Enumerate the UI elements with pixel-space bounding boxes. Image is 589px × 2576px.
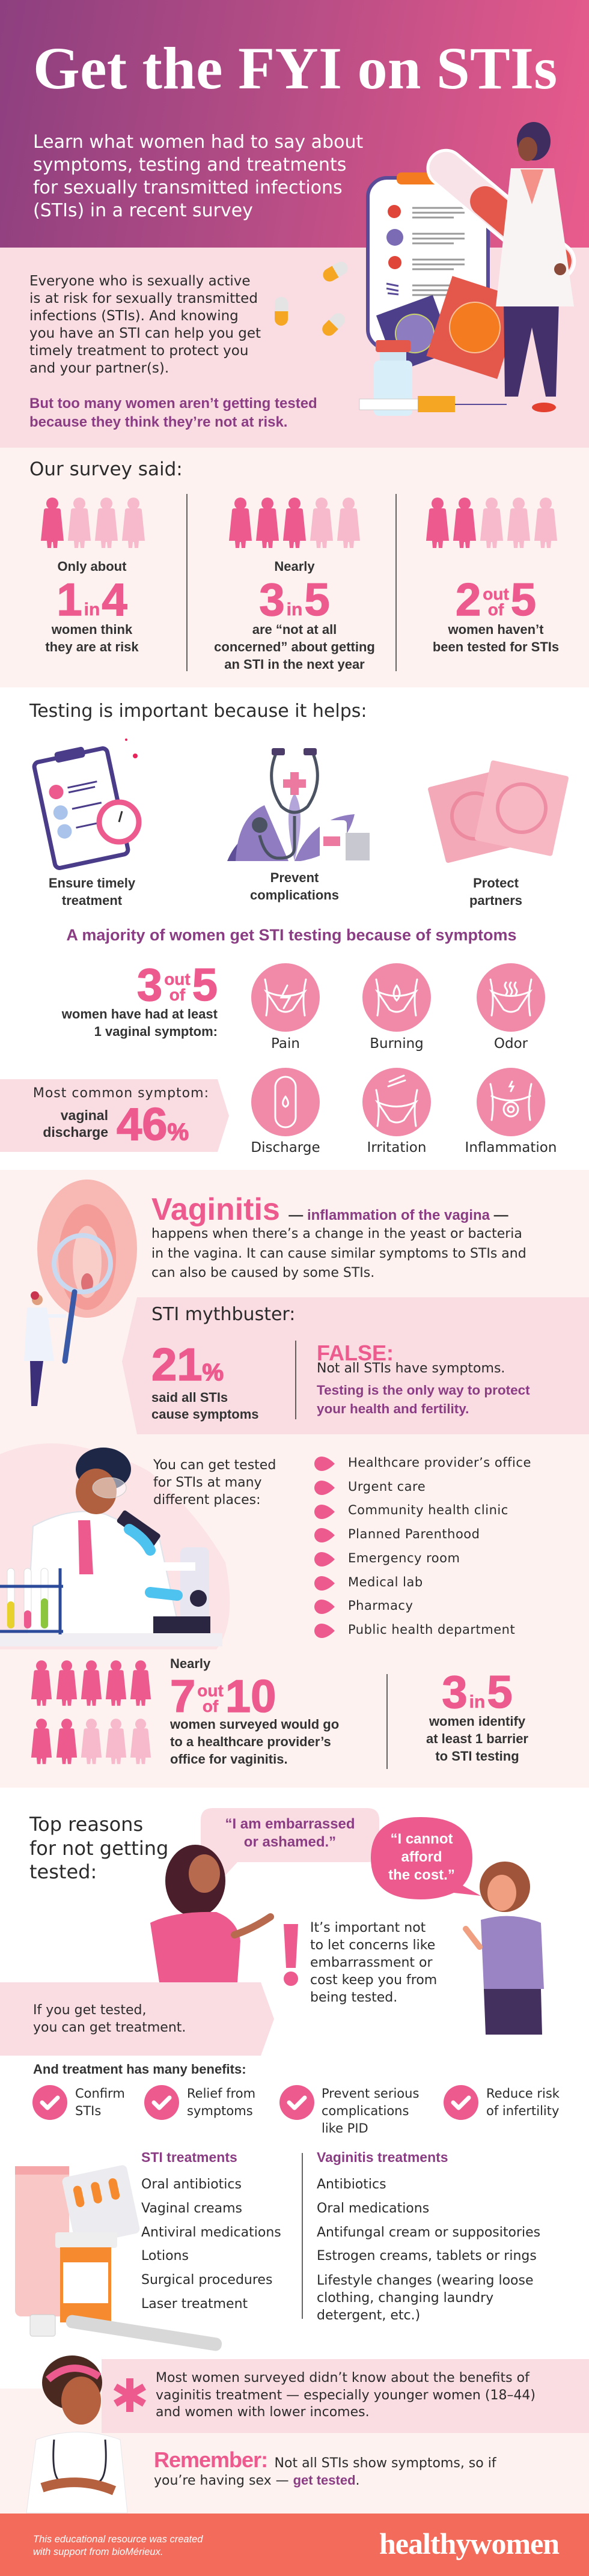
people 7 of 10 xyxy=(31,1660,151,1764)
false callout xyxy=(317,1383,530,1416)
vaginitis treatment note: Most women surveyed didn’t know about the benefits of xyxy=(156,2370,529,2386)
big number 46%: 46% xyxy=(117,1099,189,1150)
big number 3 out of 5: 3 5 xyxy=(137,960,218,1011)
vaginitis text: in the vagina. It can cause similar symptoms to STIs and xyxy=(151,1246,526,1261)
subtitle: Learn what women had to say about xyxy=(33,132,363,153)
vaginitis text: can also be caused by some STIs. xyxy=(151,1265,374,1280)
places list: Emergency room xyxy=(348,1551,460,1565)
benefit: prevent xyxy=(322,2086,419,2136)
icon: stethoscope xyxy=(227,748,370,861)
stat 3 text: been tested for STIs xyxy=(433,639,559,654)
label: prevent complications xyxy=(250,870,339,903)
survey background xyxy=(0,448,589,687)
important text: embarrassment or xyxy=(310,1955,433,1970)
vaginitis text xyxy=(151,1226,526,1280)
7 of 10 text: women surveyed would go xyxy=(170,1717,339,1732)
bubble text: embarrassed: or ashamed.” xyxy=(244,1834,336,1850)
footer logo: healthywomen xyxy=(379,2527,559,2560)
big number 1 in 4: 1in4 xyxy=(56,574,127,626)
big number 21%: 21% xyxy=(151,1339,224,1390)
stat 2 text: an STI in the next year xyxy=(224,657,365,672)
common symptom arrow box xyxy=(0,1079,229,1152)
places list: Medical lab xyxy=(348,1575,423,1589)
treatment arrow text xyxy=(33,2003,186,2035)
scientist with microscope xyxy=(0,1443,230,1649)
treatment arrow box xyxy=(0,1982,274,2056)
vaginal discharge label xyxy=(43,1107,108,1140)
big number 3 out of 5: of xyxy=(169,985,185,1004)
vaginitis section background xyxy=(0,1170,589,1788)
false text: Not all STIs have symptoms. xyxy=(317,1361,505,1376)
important text: cost keep you from xyxy=(310,1973,437,1988)
bubble text: embarrassed: “I am embarrassed xyxy=(225,1816,355,1832)
test tube xyxy=(421,143,582,287)
big number 7 out of 10: out xyxy=(197,1681,224,1700)
heading: top reasons: for not getting xyxy=(29,1836,168,1859)
condoms xyxy=(376,276,523,379)
intro text: is at risk for sexually transmitted xyxy=(29,291,258,306)
benefit: infertility: of infertility xyxy=(486,2104,559,2118)
false callout: your health and fertility. xyxy=(317,1401,469,1416)
places intro: You can get tested xyxy=(153,1458,276,1473)
footer credit: with support from bioMérieux. xyxy=(33,2547,163,2557)
woman in pink xyxy=(150,1845,270,1982)
remember band xyxy=(102,2359,589,2433)
places list: Public health department xyxy=(348,1622,515,1637)
treatment arrow text: you can get treatment. xyxy=(33,2020,186,2035)
STI treatments list: Antiviral medications xyxy=(141,2225,281,2240)
burning: Burning xyxy=(370,1036,424,1052)
barrier text: women identify xyxy=(429,1714,525,1729)
doctor woman xyxy=(26,2355,127,2513)
vaginitis treatments list: Oral medications xyxy=(317,2201,429,2216)
vulva with magnifier xyxy=(24,1180,137,1406)
benefit: confirm xyxy=(75,2086,125,2118)
STI treatments list: Lotions xyxy=(141,2249,189,2264)
big number 3 out of 5: out xyxy=(164,970,191,988)
intro callout xyxy=(29,395,317,430)
bubble text: cost: afford xyxy=(401,1849,442,1865)
stat 2 text xyxy=(214,622,375,672)
benefit: confirm: Confirm xyxy=(75,2086,125,2101)
remember line 2: you’re having sex — get tested. xyxy=(154,2473,360,2488)
heading: top reasons xyxy=(29,1813,168,1883)
benefit: prevent: Prevent serious xyxy=(322,2086,419,2101)
vaginal discharge label: discharge xyxy=(43,1124,108,1140)
asterisk xyxy=(115,2378,144,2412)
stat: only about: Only about xyxy=(58,559,126,574)
clipboard xyxy=(368,172,488,349)
STI treatments list: Surgical procedures xyxy=(141,2273,272,2288)
benefit: infertility: Reduce risk xyxy=(486,2086,560,2101)
barrier text xyxy=(426,1714,528,1764)
bottom section background xyxy=(0,2389,589,2514)
subtitle: for sexually transmitted infections xyxy=(33,177,343,198)
stat 2 text: are “not at all xyxy=(252,622,337,637)
STI treatments list: Laser treatment xyxy=(141,2297,248,2312)
vaginitis heading: Vaginitis — inflammation of the vagina — xyxy=(151,1192,508,1227)
mythbuster band xyxy=(122,1297,589,1434)
vaginitis treatment note: vaginitis treatment — especially younger women (18–44) xyxy=(156,2388,536,2403)
benefit: prevent: like PID xyxy=(322,2121,368,2136)
lifestyle changes item: detergent, etc.) xyxy=(317,2308,420,2323)
places list: Pharmacy xyxy=(348,1598,413,1613)
exclamation mark xyxy=(284,1924,298,1986)
heading: top reasons: tested: xyxy=(29,1860,97,1883)
important text xyxy=(310,1920,437,2005)
label: protect partners: Protect xyxy=(473,875,519,891)
irritation: Irritation xyxy=(367,1140,426,1156)
symptom icon outlines xyxy=(265,979,531,1127)
important text: to let concerns like xyxy=(310,1938,435,1953)
bubble text: cost xyxy=(388,1831,455,1883)
title: Get the FYI on STIs xyxy=(33,35,557,102)
treatment arrow text: If you get tested, xyxy=(33,2003,147,2018)
places list: Planned Parenthood xyxy=(348,1527,480,1541)
7 of 10 text xyxy=(170,1717,339,1767)
label: ensure timely treatment: Ensure timely xyxy=(49,875,135,891)
intro text: timely treatment to protect you xyxy=(29,343,248,359)
places intro xyxy=(153,1458,276,1508)
inflammation: Inflammation xyxy=(465,1140,557,1156)
intro text xyxy=(29,273,261,376)
vaginal discharge label: vaginal xyxy=(61,1107,108,1123)
places list: Healthcare provider’s office xyxy=(348,1455,531,1470)
benefit: infertility xyxy=(486,2086,560,2118)
7 of 10 text: office for vaginitis. xyxy=(170,1752,288,1767)
subtitle xyxy=(33,132,363,221)
lifestyle changes item xyxy=(317,2272,534,2324)
most common symptom text: Most common symptom: xyxy=(33,1086,209,1101)
big number 3 in 5: 3in5 xyxy=(259,574,330,626)
big number 2 out of 5: 2 5 xyxy=(456,574,536,626)
woman in lab coat xyxy=(496,122,574,412)
pills xyxy=(275,259,350,338)
hero illustration xyxy=(275,122,582,416)
stat 1 text: they are at risk xyxy=(45,639,139,654)
vaginitis treatments heading: Vaginitis treatments xyxy=(317,2149,448,2165)
vial and syringe xyxy=(359,340,507,416)
heading: testing important: Testing is important because it helps: xyxy=(29,701,367,722)
benefit: relief xyxy=(187,2086,255,2118)
stat 1 text: women think xyxy=(52,622,132,637)
stat 3 text: women haven’t xyxy=(448,622,543,637)
place bullets xyxy=(314,1457,335,1638)
header background xyxy=(0,0,589,248)
places list: Urgent care xyxy=(348,1479,426,1494)
lifestyle changes item: clothing, changing laundry xyxy=(317,2291,493,2306)
stat 2 text: concerned” about getting xyxy=(214,639,375,654)
pain: Pain xyxy=(271,1036,300,1052)
stat: nearly: Nearly xyxy=(274,559,315,574)
intro text: you have an STI can help you get xyxy=(29,326,261,341)
label: ensure timely treatment: treatment xyxy=(62,893,122,908)
subtitle: symptoms, testing and treatments xyxy=(33,154,346,175)
bubble text: cost: the cost.” xyxy=(388,1867,455,1883)
big number 7 out of 10: of xyxy=(203,1697,218,1716)
FALSE label: FALSE: xyxy=(317,1341,394,1365)
intro background xyxy=(0,248,589,448)
label: prevent complications: complications xyxy=(250,888,339,903)
woman in purple xyxy=(466,1862,544,2035)
7 of 10 text: to a healthcare provider’s xyxy=(170,1734,331,1749)
big number 3 in 5 barrier: 3in5 xyxy=(442,1667,513,1718)
speech bubble: cost xyxy=(371,1817,481,1899)
vaginitis treatments list xyxy=(317,2177,540,2264)
symptom stat text xyxy=(61,1006,218,1039)
heading: majority symptoms: A majority of women get STI testing because of symptoms xyxy=(66,926,517,944)
survey people col1 xyxy=(41,498,145,548)
bubble text: embarrassed xyxy=(225,1816,355,1850)
STI treatments list xyxy=(141,2177,281,2312)
places list xyxy=(348,1455,531,1637)
STI treatments list: Vaginal creams xyxy=(141,2201,242,2216)
footer bar xyxy=(0,2514,589,2576)
STI treatments heading: STI treatments xyxy=(141,2149,237,2165)
treatment products illustration xyxy=(15,2164,222,2352)
discharge: Discharge xyxy=(251,1140,320,1156)
symptom labels row 1 xyxy=(271,1036,528,1052)
big number 2 out of 5: of xyxy=(488,600,504,619)
mythbuster heading: STI mythbuster: xyxy=(151,1304,295,1325)
bubble text: cost: “I cannot xyxy=(390,1831,453,1847)
vaginitis treatments list: Antifungal cream or suppositories xyxy=(317,2225,540,2240)
survey people col2 xyxy=(229,498,360,548)
heading: top reasons: Top reasons xyxy=(29,1813,143,1836)
speech bubble: embarrassed xyxy=(201,1808,379,1884)
stat 3 text xyxy=(433,622,559,654)
odor: Odor xyxy=(494,1036,528,1052)
stat 1 text xyxy=(45,622,139,654)
benefit: relief: symptoms xyxy=(187,2104,253,2118)
intro callout: because they think they’re not at risk. xyxy=(29,414,287,430)
benefits heading: And treatment has many benefits: xyxy=(33,2062,246,2077)
important text: It’s important not xyxy=(310,1920,426,1935)
benefit: relief: Relief from xyxy=(187,2086,255,2101)
vaginitis treatments list: Estrogen creams, tablets or rings xyxy=(317,2249,537,2264)
vaginitis treatment note: and women with lower incomes. xyxy=(156,2405,370,2420)
barrier text: to STI testing xyxy=(435,1749,519,1764)
icon: clipboard with stopwatch xyxy=(32,738,139,869)
label: protect partners: partners xyxy=(469,893,522,908)
subtitle: (STIs) in a recent survey xyxy=(33,200,253,221)
places list: Community health clinic xyxy=(348,1503,508,1517)
intro callout: But too many women aren’t getting tested xyxy=(29,395,317,412)
benefit: confirm: STIs xyxy=(75,2104,101,2118)
21% text: said all STIs xyxy=(151,1390,228,1405)
symptom icons xyxy=(251,963,545,1136)
symptom stat text: 1 vaginal symptom: xyxy=(94,1024,218,1039)
symptom stat text: women have had at least xyxy=(62,1006,218,1022)
vaginitis text: happens when there’s a change in the yeast or bacteria xyxy=(151,1226,522,1241)
footer credit xyxy=(33,2533,203,2559)
big number 7 out of 10: 7 10 xyxy=(170,1671,276,1722)
label: protect partners xyxy=(469,875,522,908)
icon: condoms xyxy=(427,760,569,863)
label: ensure timely treatment xyxy=(49,875,135,908)
intro text: infections (STIs). And knowing xyxy=(29,308,239,324)
barrier text: at least 1 barrier xyxy=(426,1731,528,1746)
footer credit: This educational resource was created xyxy=(33,2534,203,2545)
false callout: Testing is the only way to protect xyxy=(317,1383,530,1398)
small doctor figure xyxy=(24,1291,66,1406)
symptom labels row 2 xyxy=(251,1140,557,1156)
21% text: cause symptoms xyxy=(151,1407,259,1422)
vaginitis treatments list: Antibiotics xyxy=(317,2177,386,2192)
remember line 1: Remember: Not all STIs show symptoms, so if xyxy=(154,2447,496,2472)
benefit checks xyxy=(32,2085,478,2120)
label: prevent complications: Prevent xyxy=(270,870,319,885)
intro text: Everyone who is sexually active xyxy=(29,273,251,289)
places intro: different places: xyxy=(153,1493,261,1508)
big number 2 out of 5: out xyxy=(483,585,509,603)
benefit: prevent: complications xyxy=(322,2104,409,2118)
stat: nearly 7 of 10: Nearly xyxy=(170,1656,210,1671)
lifestyle changes item: Lifestyle changes (wearing loose xyxy=(317,2273,534,2288)
intro text: and your partner(s). xyxy=(29,361,169,376)
21% text xyxy=(151,1390,259,1422)
heading: our survey said: Our survey said: xyxy=(29,458,183,480)
survey people col3 xyxy=(426,498,557,548)
vaginitis treatment note xyxy=(156,2370,536,2422)
places intro: for STIs at many xyxy=(153,1475,262,1490)
STI treatments list: Oral antibiotics xyxy=(141,2177,242,2192)
important text: being tested. xyxy=(310,1990,397,2005)
